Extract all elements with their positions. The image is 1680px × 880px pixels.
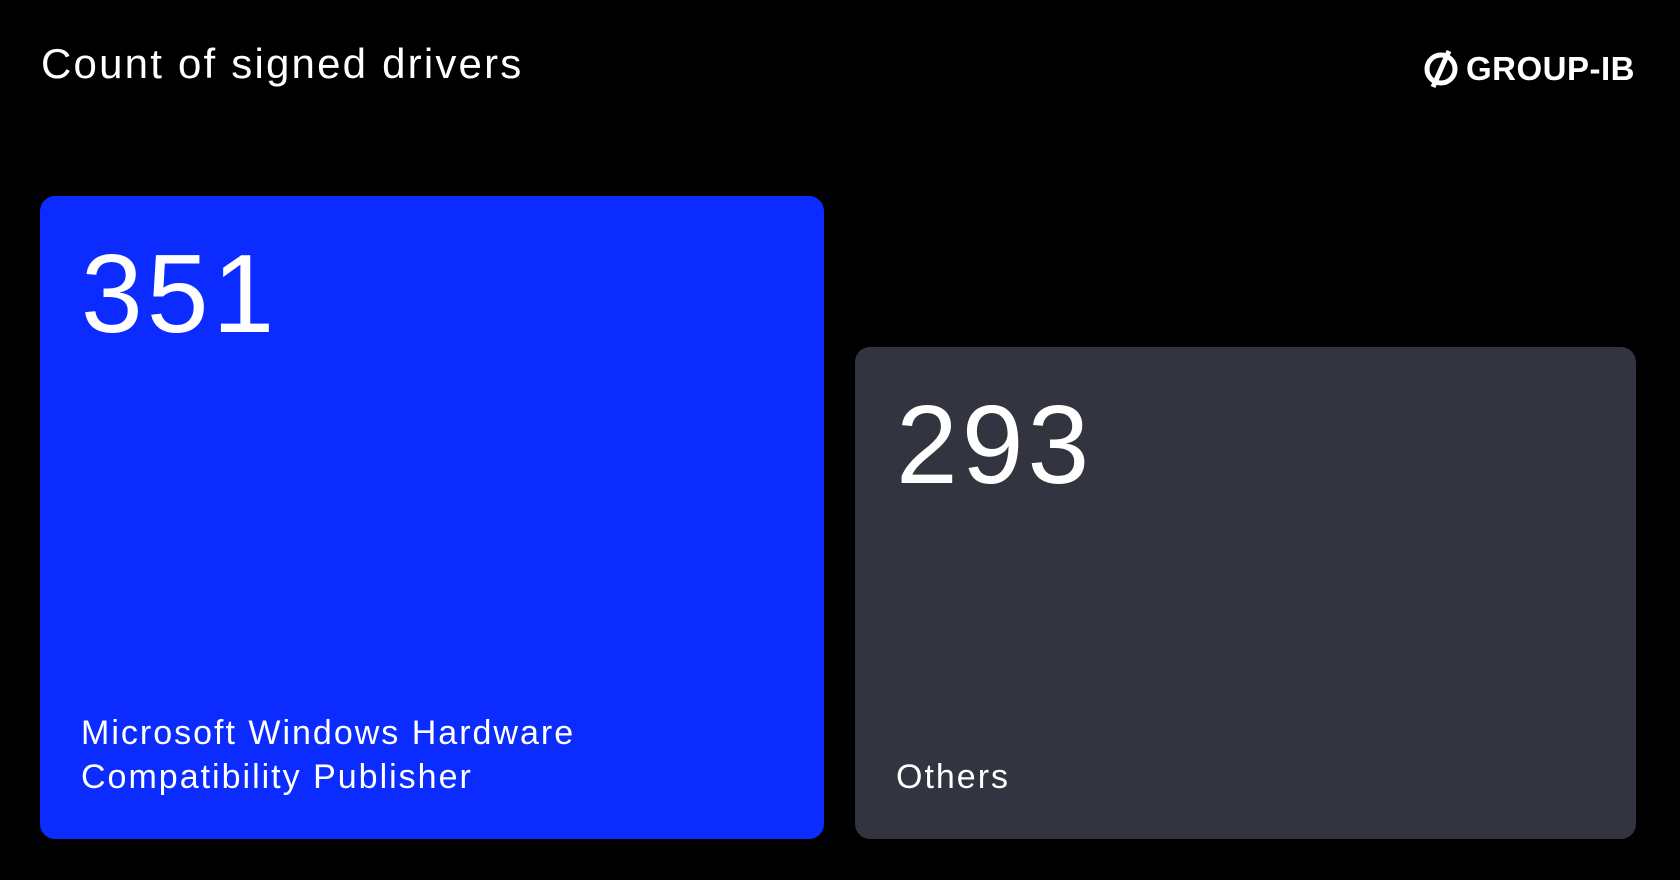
logo: GROUP-IB <box>1466 50 1635 87</box>
label Microsoft: Compatibility Publisher <box>81 758 473 796</box>
label Others: Others <box>896 758 1010 796</box>
label Microsoft: Microsoft Windows Hardware <box>81 714 575 752</box>
title: Count of signed drivers <box>41 40 524 87</box>
value 293: 293 <box>896 383 1093 507</box>
value 351: 351 <box>81 232 278 356</box>
label Microsoft <box>81 714 575 796</box>
panel: Others <box>855 347 1636 839</box>
panel: Microsoft <box>40 196 824 839</box>
